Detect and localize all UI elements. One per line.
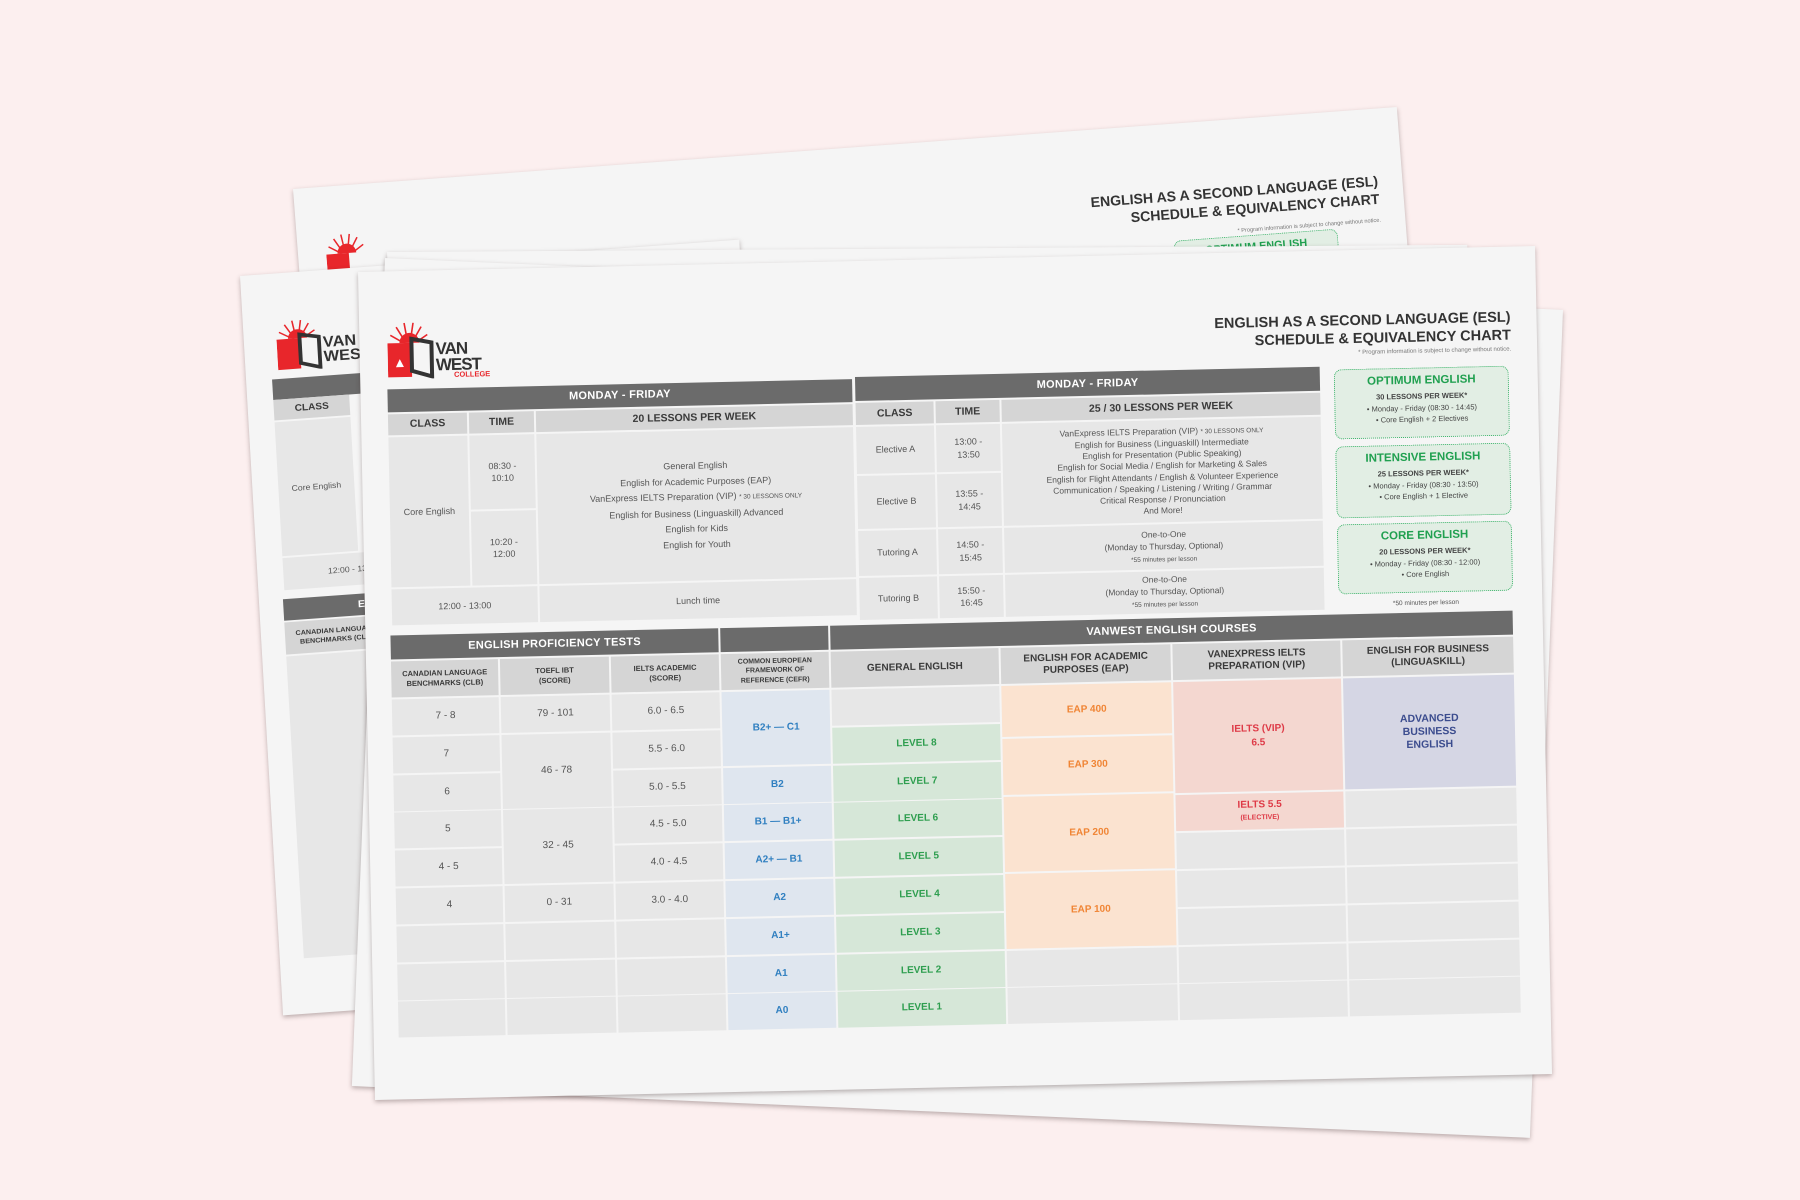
paper: main chart: 32 - 45 (543, 840, 574, 851)
paper: main chart: 0 - 31 (546, 897, 572, 908)
paper: main chart: *55 minutes per lesson (1131, 555, 1197, 564)
paper: main chart: 12:00 (493, 549, 516, 559)
logo: VanWest College: COLLEGE (454, 369, 490, 379)
program box: core english (1337, 521, 1513, 594)
paper: main chart: 4 - 5 (439, 861, 459, 873)
paper: main chart: A2 (773, 892, 786, 903)
paper: main chart: LEVEL 5 (898, 851, 939, 863)
paper: main chart: VANWEST ENGLISH COURSES (1086, 622, 1257, 638)
paper: main chart: 6 (444, 786, 450, 798)
paper: main chart: VanExpress IELTS Preparation (VIP) * 30 LESSONS ONLY (1059, 425, 1264, 438)
business levels: ADVANCED (1400, 712, 1459, 725)
program box: core english: • Monday - Friday (08:30 - 12:00) (1370, 557, 1480, 568)
paper: main chart: English for Social Media / English for Marketing & Sales (1057, 458, 1267, 473)
paper: main chart: EAP 100 (1071, 903, 1111, 915)
VIP levels: 6.5 (1251, 737, 1265, 748)
paper: main chart: A1+ (771, 930, 790, 941)
paper: main chart: 10:20 - (490, 536, 518, 547)
CEFR column (720, 626, 836, 1030)
paper: back top (tilted) (293, 107, 1456, 967)
paper: main chart: CANADIAN LANGUAGE (402, 668, 487, 678)
paper: main chart: 20 LESSONS PER WEEK (632, 411, 756, 425)
back title: SCHEDULE & EQUIVALENCY CHART (1130, 192, 1380, 226)
back green box (1173, 229, 1342, 307)
back title: * Program information is subject to change without notice. (1237, 218, 1381, 234)
title: ENGLISH AS A SECOND LANGUAGE (ESL) (1214, 310, 1511, 332)
left schedule strip (272, 347, 720, 400)
paper: main chart: 14:45 (958, 501, 981, 511)
back title: ENGLISH AS A SECOND LANGUAGE (ESL) (1090, 174, 1379, 211)
paper: main chart: 5.5 - 6.0 (648, 743, 685, 755)
paper: main chart: FRAMEWORK OF (746, 667, 804, 675)
paper: main chart: English for Academic Purposes (EAP) (620, 474, 771, 488)
back green box: OPTIMUM ENGLISH (1205, 238, 1308, 256)
paper: main chart: MONDAY - FRIDAY (569, 388, 671, 402)
paper: main chart: VANEXPRESS IELTS (1207, 647, 1306, 660)
paper: main chart: Lunch time (676, 595, 720, 606)
paper: main chart: VanExpress IELTS Preparation (VIP) * 30 LESSONS ONLY (590, 491, 802, 504)
paper: main chart: B2 (771, 779, 784, 790)
paper: main chart: EAP 200 (1069, 826, 1109, 838)
paper: main chart: And More! (1143, 505, 1183, 516)
paper: main chart: 25 / 30 LESSONS PER WEEK (1089, 400, 1233, 415)
paper: main chart: 4.0 - 4.5 (651, 856, 687, 868)
paper: main chart: A1 (775, 968, 788, 979)
courses table (830, 610, 1520, 1028)
logo: VanWest College: WEST (436, 354, 483, 374)
paper: back left (skewed): 12:00 - 13:00 (328, 563, 379, 575)
left logo (276, 320, 372, 370)
paper: main chart: PURPOSES (EAP) (1043, 663, 1129, 676)
paper: main chart (358, 246, 1552, 1100)
paper: main chart: B2+ — C1 (753, 722, 800, 734)
program box: intensive english: • Monday - Friday (08:30 - 13:50) (1368, 479, 1479, 490)
program box: core english: CORE ENGLISH (1381, 529, 1468, 543)
program box: intensive english: 25 LESSONS PER WEEK* (1378, 468, 1469, 479)
paper: main chart: Elective A (876, 444, 915, 455)
paper: main chart: CLASS (410, 418, 445, 430)
paper: main chart: TIME (955, 405, 980, 418)
left schedule strip: MONDAY - FRIDAY (447, 364, 545, 382)
paper: main chart: B1 — B1+ (755, 816, 802, 828)
left logo: VAN (322, 332, 357, 351)
paper: main chart: (SCORE) (539, 675, 571, 685)
title (1214, 310, 1511, 356)
title: SCHEDULE & EQUIVALENCY CHART (1254, 328, 1511, 349)
business levels (1343, 675, 1516, 789)
paper: main chart: ENGLISH FOR ACADEMIC (1023, 650, 1148, 664)
paper: main chart: (Monday to Thursday, Optional) (1104, 539, 1223, 552)
paper: main chart: 13:50 (957, 449, 980, 459)
paper: main chart: (SCORE) (649, 673, 681, 683)
paper: main chart: English for Business (Linguaskill) Advanced (609, 506, 783, 520)
paper: main chart: English for Business (Linguaskill) Intermediate (1075, 436, 1249, 450)
paper: main chart: BENCHMARKS (CLB) (406, 677, 483, 688)
paper: back left (skewed): ENGLISH PROFICIENCY TESTS (358, 587, 524, 610)
VIP levels (1173, 678, 1343, 793)
paper: main chart: LEVEL 1 (902, 1002, 942, 1014)
paper: main chart: IELTS ACADEMIC (633, 663, 697, 673)
paper: main chart: 7 - 8 (435, 710, 456, 722)
schedule table: 20 lessons (387, 379, 857, 626)
paper: main chart: LEVEL 6 (898, 813, 938, 825)
logo: VanWest College (388, 322, 490, 379)
general english levels (831, 686, 1000, 726)
paper: back middle (387, 245, 1500, 1072)
paper: main chart: COMMON EUROPEAN (738, 657, 812, 666)
paper: back left (skewed): Core English (291, 480, 341, 493)
paper: main chart: General English (663, 460, 727, 471)
paper: main chart: Core English (404, 506, 455, 517)
paper: main chart: CLASS (877, 407, 913, 419)
title: * Program information is subject to change without notice. (1358, 347, 1511, 356)
paper: main chart: LEVEL 3 (900, 927, 941, 939)
EAP levels: EAP 400 (1067, 703, 1107, 715)
paper: main chart: English for Flight Attendants / English & Volunteer Experience (1046, 469, 1278, 484)
paper: main chart: PREPARATION (VIP) (1208, 659, 1305, 672)
paper: main chart: 10:10 (491, 473, 514, 483)
paper: main chart: LEVEL 4 (899, 889, 940, 901)
paper: main chart: (LINGUASKILL) (1391, 656, 1465, 668)
EAP levels (1001, 682, 1172, 737)
business levels: ENGLISH (1406, 738, 1453, 751)
paper: main chart: 08:30 - (488, 460, 517, 471)
paper: main chart: 13:00 - (954, 437, 982, 447)
paper: main chart: Critical Response / Pronunciation (1100, 493, 1226, 506)
paper: main chart: 16:45 (960, 597, 983, 608)
paper: main chart: 12:00 - 13:00 (438, 600, 491, 611)
program box: intensive english: INTENSIVE ENGLISH (1365, 450, 1481, 465)
paper: main chart: LEVEL 2 (901, 965, 941, 977)
schedule table: 25/30 lessons (855, 366, 1324, 620)
paper: main chart: A0 (775, 1005, 788, 1016)
paper: main chart: LEVEL 8 (896, 738, 937, 750)
paper: main chart: 5.0 - 5.5 (649, 781, 686, 793)
paper: main chart: Elective B (876, 496, 917, 507)
paper: main chart: English for Presentation (Public Speaking) (1082, 448, 1242, 461)
program box: intensive english: • Core English + 1 Elective (1379, 490, 1468, 501)
program box: optimum english: • Monday - Friday (08:30 - 14:45) (1367, 402, 1477, 413)
paper: main chart: 13:55 - (955, 489, 983, 499)
paper: main chart: TOEFL IBT (535, 666, 574, 676)
paper: main chart: One-to-One (1142, 574, 1187, 585)
paper: main chart: English for Kids (665, 523, 728, 534)
paper: main chart: 3.0 - 4.0 (651, 894, 688, 906)
paper: back left (skewed): CANADIAN LANGUAGE (295, 623, 377, 637)
program box: core english: 20 LESSONS PER WEEK* (1379, 546, 1471, 557)
paper: main chart: 79 - 101 (537, 708, 574, 719)
paper: main chart: TIME (489, 416, 514, 429)
paper: main chart: LEVEL 7 (897, 776, 938, 788)
paper: main chart: A2+ — B1 (755, 854, 802, 866)
paper: main chart: (ELECTIVE) (1240, 814, 1279, 822)
paper: main chart: Communication / Speaking / Listening / Writing / Grammar (1053, 481, 1272, 495)
paper: main chart: ENGLISH PROFICIENCY TESTS (468, 635, 641, 651)
paper: main chart: 15:45 (959, 552, 982, 562)
paper: main chart: ENGLISH FOR BUSINESS (1367, 643, 1489, 656)
paper: back left (skewed): CLASS (294, 401, 329, 414)
paper: main chart: 5 (445, 823, 451, 835)
paper: main chart: One-to-One (1141, 528, 1186, 539)
paper: main chart: 4.5 - 5.0 (650, 818, 687, 830)
paper: main chart: GENERAL ENGLISH (867, 661, 963, 674)
left logo: WEST (323, 345, 372, 365)
program box: core english: • Core English (1401, 569, 1449, 579)
paper: main chart: 46 - 78 (541, 765, 572, 776)
paper: main chart: IELTS 5.5 (1237, 799, 1282, 811)
program box: optimum english: 30 LESSONS PER WEEK* (1376, 391, 1467, 402)
paper: main chart: Tutoring B (878, 593, 919, 604)
logo: VanWest College: VAN (435, 339, 468, 358)
paper: main chart: (Monday to Thursday, Optional) (1105, 585, 1224, 598)
program box: optimum english: OPTIMUM ENGLISH (1367, 373, 1476, 388)
back title (1090, 174, 1381, 234)
paper: main chart: *55 minutes per lesson (1132, 601, 1198, 609)
paper: main chart: REFERENCE (CEFR) (741, 676, 810, 684)
back logo (326, 234, 364, 270)
paper: main chart: 6.0 - 6.5 (647, 705, 684, 717)
paper: main chart: Tutoring A (877, 547, 918, 558)
VIP levels: IELTS (VIP) (1231, 723, 1285, 735)
footnote: *50 minutes per lesson (1393, 598, 1459, 607)
paper: main chart: 7 (443, 748, 449, 760)
paper: back right/bottom (352, 258, 1563, 1138)
proficiency tests table (390, 628, 726, 1038)
paper: main chart: English for Youth (663, 538, 731, 550)
paper: main chart: EAP 300 (1068, 759, 1108, 771)
paper: main chart: 15:50 - (957, 585, 985, 596)
paper: back left (skewed) (240, 240, 782, 1015)
paper: main chart: MONDAY - FRIDAY (1036, 376, 1139, 391)
paper: main chart: 14:50 - (956, 540, 984, 550)
paper: back left (skewed): BENCHMARKS (CLB) (300, 632, 374, 646)
program box: intensive english (1335, 443, 1512, 518)
program box: optimum english: • Core English + 2 Electives (1376, 413, 1468, 424)
business levels: BUSINESS (1403, 725, 1456, 738)
paper: main chart: 4 (447, 899, 452, 911)
program box: optimum english (1334, 366, 1510, 439)
